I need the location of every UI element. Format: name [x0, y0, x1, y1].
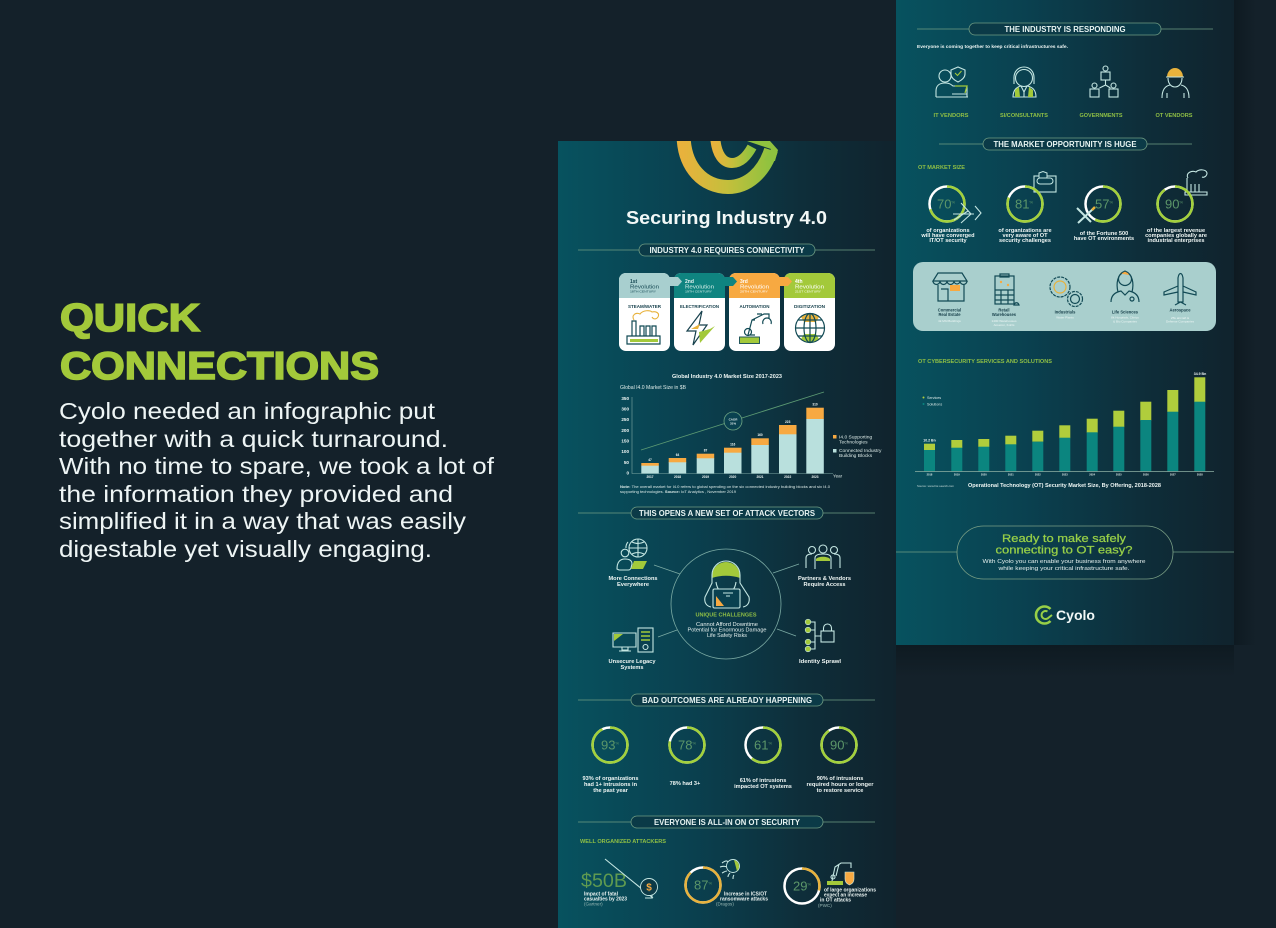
stat: 50B: $: [646, 882, 652, 894]
stat ring: 61 percent: 61: [754, 738, 768, 752]
stat: 87 percent: [686, 860, 768, 906]
callout: cagr: 31%: [730, 422, 736, 426]
stat ring: 90 percent market: of the largest revenue: [1147, 228, 1205, 234]
panel: infographic page two: [896, 0, 1234, 645]
stat ring: 57 percent: of the Fortune 500: [1080, 231, 1128, 237]
card: 4th revolution: [784, 273, 835, 351]
stat labels: the past year: [593, 788, 629, 794]
stat ring: 81 percent: [998, 172, 1056, 244]
sector labels: Retail: [998, 308, 1010, 312]
icon: aerospace plane: [1164, 274, 1196, 305]
sector labels: Real Estate: [938, 312, 961, 317]
subheading: ot market size: OT MARKET SIZE: [918, 165, 965, 171]
card: 2nd revolution: [674, 273, 737, 351]
heading: quick connections: CONNECTIONS: [60, 345, 379, 388]
stat labels: 93% of organizations: [583, 776, 638, 782]
section header: all-in: [578, 816, 875, 828]
stat: 50B: Impact of fatal: [584, 892, 619, 898]
note: [620, 485, 830, 494]
stat: 29 percent: %: [807, 882, 811, 886]
bar chart: global industry 4.0 market size: 350: [621, 396, 629, 401]
bar chart: global industry 4.0 market size: 2020: [729, 475, 736, 479]
stat: 50B: [581, 859, 658, 906]
bar chart: ot security market size: 2019: [954, 472, 960, 476]
stat ring: 70 percent: will have converged: [920, 233, 975, 239]
callout: call to action: [896, 526, 1234, 579]
title: Securing Industry 4.0: [626, 208, 827, 228]
card: 4th revolution: 4th: [795, 279, 802, 285]
panel: sectors: 4k Mfd Buildings: [938, 319, 961, 323]
bar chart: ot security market size: 2022: [1035, 472, 1041, 476]
label: consultants: SI/CONSULTANTS: [1000, 113, 1048, 119]
stat ring: 90 percent market: 90: [1165, 196, 1179, 212]
card: 1st revolution: 18TH CENTURY: [630, 290, 656, 294]
sector labels: Commercial: [938, 308, 961, 312]
label: systems: Systems: [620, 665, 644, 671]
stat ring: 90 percent market: companies globally are: [1145, 233, 1207, 239]
stat: 50B: casualties by 2023: [584, 896, 627, 902]
bar chart: ot security market size: 2023: [1062, 472, 1068, 476]
panel: infographic page one: [558, 135, 896, 928]
bar chart: global industry 4.0 market size: 2021: [756, 475, 764, 479]
stat: 87 percent: (Dragos): [716, 902, 734, 906]
bar chart: global industry 4.0 market size: 47: [648, 458, 652, 462]
legend: I4.0 Supporting: [839, 434, 872, 440]
icon: more connections everywhere: [617, 539, 647, 570]
panel: sectors: 25k aircraft &: [1171, 316, 1190, 320]
central circle: unique challenges: [654, 549, 799, 659]
legend: Year: [833, 474, 843, 478]
stat labels: to restore service: [817, 788, 863, 794]
callout: call to action: while keeping your critical infrastructure safe.: [997, 566, 1130, 572]
heading: quick connections: QUICK: [60, 297, 200, 340]
card: 2nd revolution: 19TH CENTURY: [685, 290, 712, 294]
stat ring: 57 percent: [1074, 186, 1134, 242]
intro text: Everyone is coming together to keep critical infrastructures safe.: [917, 44, 1068, 49]
bar chart: global industry 4.0 market size: 223: [785, 420, 791, 424]
chart source and caption: Operational Technology (OT) Security Market Size, By Offering, 2018-2028: [968, 483, 1161, 489]
stat: 50B: $50B: [581, 871, 627, 892]
icon: partners and vendors: [806, 545, 840, 569]
chart source and caption: Source: www.fior-search.com: [917, 484, 954, 488]
icon: ot vendors: [1162, 68, 1189, 98]
central circle: unique challenges: Cannot Afford Downtime: [696, 622, 758, 628]
stat ring: 78 percent: [670, 728, 704, 762]
bar chart: global industry 4.0 market size: 160: [757, 433, 763, 437]
card: 3rd revolution: [729, 273, 792, 351]
label: more connections: More Connections: [608, 576, 658, 582]
bar chart: ot security market size: 2020: [981, 472, 987, 476]
section header: attack vectors: THIS OPENS A NEW SET OF ATTACK VECTORS: [639, 509, 816, 518]
stat ring: 57 percent: %: [1109, 200, 1113, 204]
bar chart: global industry 4.0 market size: Global I4.0 Market Size in $B: [620, 385, 687, 391]
bar chart: ot security market size: 2021: [1008, 472, 1014, 476]
callout: call to action: connecting to OT easy?: [996, 544, 1132, 556]
bar chart: global industry 4.0 market size: 2018: [674, 475, 681, 479]
bar chart: global industry 4.0 market size: 2019: [702, 475, 709, 479]
stat ring: 93 percent: %: [615, 740, 619, 746]
stat ring: 90 percent: [822, 728, 856, 762]
section header: attack vectors: [578, 507, 875, 519]
bar chart: global industry 4.0 market size: 310: [812, 402, 818, 406]
stat ring: 78 percent: %: [692, 740, 696, 746]
label: require access: Require Access: [804, 582, 846, 588]
text block: project description: [59, 398, 495, 562]
stat ring: 90 percent: %: [844, 740, 848, 746]
card: 4th revolution: Revolution: [795, 284, 824, 290]
bar chart: global industry 4.0 market size: 200: [621, 428, 629, 433]
card: 2nd revolution: Revolution: [685, 284, 714, 290]
label: unsecure legacy: Unsecure Legacy: [608, 659, 656, 665]
bar chart: global industry 4.0 market size: 2022: [784, 475, 791, 479]
stat: 29 percent: [784, 863, 876, 908]
stat ring: 90 percent market: [1145, 170, 1207, 244]
heading: quick connections: [60, 297, 379, 388]
panel: sectors: [913, 262, 1216, 331]
stat ring: 90 percent market: %: [1179, 200, 1183, 204]
card: 3rd revolution: AUTOMATION: [740, 304, 770, 309]
bar chart: global industry 4.0 market size: 300: [621, 406, 629, 412]
note: supporting technologies. Source: IoT Analytics , November 2019: [620, 490, 736, 494]
sector labels: Aerospace: [1170, 308, 1191, 312]
legend: Solutions: [927, 402, 942, 406]
icon: commercial real estate: [933, 273, 967, 301]
icon: identity sprawl: [805, 619, 834, 652]
text block: project description: digestable yet visually engaging.: [59, 536, 432, 562]
card: 2nd revolution: 2nd: [685, 279, 694, 285]
bar chart: ot security market size: 2025: [1116, 472, 1122, 476]
stat ring: 61 percent: %: [768, 740, 772, 746]
legend: [833, 434, 882, 478]
text block: project description: simplified it in a way that was easily: [59, 508, 467, 534]
stat ring: 70 percent: %: [951, 200, 955, 204]
stat ring: 70 percent: IT/OT security: [929, 238, 968, 244]
bar chart: global industry 4.0 market size: 2017: [646, 475, 654, 479]
sector labels: Warehouses: [992, 312, 1017, 317]
text block: project description: Cyolo needed an infographic put: [59, 398, 436, 424]
stat ring: 70 percent: of organizations: [926, 228, 970, 234]
icon: cyolo logo arc: [684, 135, 778, 187]
panel: sectors: Water Plants: [1056, 316, 1074, 320]
central circle: unique challenges: Potential for Enormous Damage: [688, 628, 766, 634]
bar chart: global industry 4.0 market size: 64: [676, 453, 679, 457]
stat: 87 percent: ransomware attacks: [720, 896, 768, 902]
stat: 87 percent: Increase in ICS/OT: [724, 892, 767, 898]
icon: retail warehouse: [995, 274, 1019, 305]
stat labels: required hours or longer: [806, 782, 874, 788]
stat ring: 70 percent: [920, 186, 981, 244]
stat: 29 percent: 29: [793, 878, 807, 894]
section header: industry responding: [917, 23, 1213, 35]
stat ring: 81 percent: %: [1029, 200, 1033, 204]
icon: life sciences: [1111, 271, 1139, 302]
stat labels: 78% had 3+: [670, 781, 701, 787]
stat labels: 61% of intrusions: [740, 778, 786, 784]
label: partners: Partners & Vendors: [798, 576, 851, 582]
section header: connectivity: [578, 244, 875, 256]
bar chart: global industry 4.0 market size: Global Industry 4.0 Market Size 2017-2023: [672, 374, 782, 380]
stat labels: had 1+ intrusions in: [584, 782, 638, 788]
legend: Connected Industry: [839, 448, 882, 454]
central circle: unique challenges: UNIQUE CHALLENGES: [696, 612, 757, 618]
sector labels: Industrials: [1055, 310, 1076, 314]
stat ring: 93 percent: 93: [601, 738, 615, 752]
bar chart: global industry 4.0 market size: 100: [621, 449, 629, 454]
diagram: attack vectors: [608, 539, 851, 671]
bar chart: ot security market size: 34.9 Bn: [1194, 372, 1206, 376]
section header: connectivity: INDUSTRY 4.0 REQUIRES CONNECTIVITY: [650, 246, 805, 255]
stat ring: 57 percent: have OT environments: [1074, 236, 1134, 242]
icon: industrials gears: [1050, 277, 1082, 306]
card: 1st revolution: STEAM/WATER: [628, 304, 661, 309]
stat: 87 percent: 87: [694, 878, 708, 892]
icon: unsecure legacy computer: [613, 628, 653, 652]
callout: call to action: With Cyolo you can enable your business from anywhere: [982, 559, 1146, 565]
bar chart: ot security market size: 2026: [1143, 472, 1149, 476]
subheading: cybersecurity services: OT CYBERSECURITY SERVICES AND SOLUTIONS: [918, 359, 1052, 365]
stat: 29 percent: (PWC): [818, 903, 832, 908]
subheading: well organized attackers: WELL ORGANIZED ATTACKERS: [580, 839, 666, 845]
icon: it vendors: [936, 67, 968, 97]
bar chart: global industry 4.0 market size: 2023: [811, 475, 819, 479]
stat ring: 57 percent: 57: [1095, 196, 1109, 212]
legend: Building Blocks: [839, 453, 873, 459]
section header: market opportunity: THE MARKET OPPORTUNITY IS HUGE: [994, 140, 1137, 149]
stat ring: 81 percent: security challenges: [999, 238, 1051, 244]
bar chart: global industry 4.0 market size: 0: [626, 470, 629, 476]
callout: call to action: Ready to make safely: [1002, 533, 1127, 545]
bar chart: ot security market size: 2027: [1170, 472, 1176, 476]
icon: governments: [1090, 66, 1118, 97]
label: governments: GOVERNMENTS: [1080, 113, 1123, 119]
section header: industry responding: THE INDUSTRY IS RESPONDING: [1004, 25, 1126, 34]
stat: 50B: (Gartner): [584, 902, 603, 906]
icon: consultants: [1013, 67, 1036, 97]
stat ring: 93 percent: [592, 728, 628, 762]
section header: bad outcomes: [578, 694, 875, 706]
sector labels: [938, 308, 1191, 317]
bar chart: global industry 4.0 market size: 50: [624, 460, 629, 465]
stat: 87 percent: %: [708, 880, 712, 886]
logo: cyolo: Cyolo: [1056, 607, 1095, 623]
sector labels: Life Sciences: [1112, 310, 1139, 314]
panel: sectors: Amazon, Kohls: [994, 323, 1015, 327]
stat: 29 percent: in OT attacks: [820, 898, 851, 904]
text block: project description: the information they provided and: [59, 481, 453, 507]
bar chart: ot security market size: 2018: [927, 472, 933, 476]
bar chart: global industry 4.0 market size: 150: [621, 438, 629, 444]
legend: Technologies: [839, 440, 868, 446]
bar chart: ot security market size: [915, 372, 1214, 489]
central circle: unique challenges: Life Safety Risks: [707, 633, 747, 639]
note: Note: The overall market for I4.0 refers to global spending on the six connected industry building blocks and six I4.0: [620, 485, 830, 489]
card: 4th revolution: DIGITIZATION: [794, 304, 825, 309]
stat labels: impacted OT systems: [734, 784, 792, 790]
panel: sectors: & Bio Companies: [1113, 320, 1137, 324]
card: 3rd revolution: 3rd: [740, 279, 748, 285]
card: 1st revolution: [619, 273, 682, 351]
bar chart: ot security market size: 10.2 Bn: [923, 438, 936, 442]
panel: sectors: 1400 Warehouses: [992, 319, 1017, 323]
card: 3rd revolution: 20TH CENTURY: [740, 290, 768, 294]
section header: bad outcomes: BAD OUTCOMES ARE ALREADY HAPPENING: [642, 696, 812, 705]
callout: cagr: [724, 412, 742, 430]
stat ring: 90 percent market: industrial enterprises: [1148, 238, 1204, 244]
stat: 29 percent: of large organizations: [824, 888, 876, 894]
card: 1st revolution: 1st: [630, 279, 638, 285]
bar chart: global industry 4.0 market size: 250: [621, 417, 629, 422]
stat ring: 61 percent: [746, 728, 780, 762]
bar chart: ot security market size: 2024: [1089, 472, 1096, 476]
stat ring: 78 percent: 78: [678, 738, 692, 752]
label: identity sprawl: Identity Sprawl: [799, 659, 841, 665]
card: 3rd revolution: Revolution: [740, 284, 769, 290]
stat: 29 percent: expect an increase: [824, 892, 867, 898]
stat ring: 81 percent: 81: [1015, 196, 1029, 212]
legend: [922, 396, 942, 406]
label: ot vendors: OT VENDORS: [1156, 113, 1193, 119]
label: it vendors: IT VENDORS: [934, 113, 969, 119]
bar chart: ot security market size: 2028: [1197, 472, 1203, 476]
panel: sectors: Defense Companies: [1166, 320, 1194, 324]
section header: market opportunity: [939, 138, 1192, 150]
label: everywhere: Everywhere: [617, 582, 649, 588]
logo: cyolo: [1036, 606, 1095, 623]
card: 4th revolution: 21ST CENTURY: [795, 290, 821, 294]
stat labels: [583, 776, 874, 794]
section header: all-in: EVERYONE IS ALL-IN ON OT SECURITY: [654, 818, 801, 827]
bar chart: global industry 4.0 market size: 87: [704, 448, 707, 452]
bar chart: global industry 4.0 market size: 116: [730, 442, 735, 446]
panel: sectors: 8k Hospitals, Clinics: [1111, 316, 1139, 320]
stat ring: 70 percent: 70: [937, 196, 951, 212]
card: 2nd revolution: ELECTRIFICATION: [680, 304, 719, 309]
card: 1st revolution: Revolution: [630, 284, 659, 290]
bar chart: global industry 4.0 market size: [620, 374, 882, 494]
callout: cagr: CAGR: [729, 418, 738, 422]
stat ring: 81 percent: very aware of OT: [1002, 233, 1048, 239]
stat ring: 81 percent: of organizations are: [998, 228, 1052, 234]
stat ring: 90 percent: 90: [830, 738, 844, 752]
legend: Services: [927, 396, 941, 400]
revolution cards: [619, 273, 835, 351]
text block: project description: together with a quick turnaround.: [59, 426, 448, 452]
stat labels: 90% of intrusions: [817, 776, 863, 782]
text block: project description: With no time to spare, we took a lot of: [59, 453, 495, 479]
